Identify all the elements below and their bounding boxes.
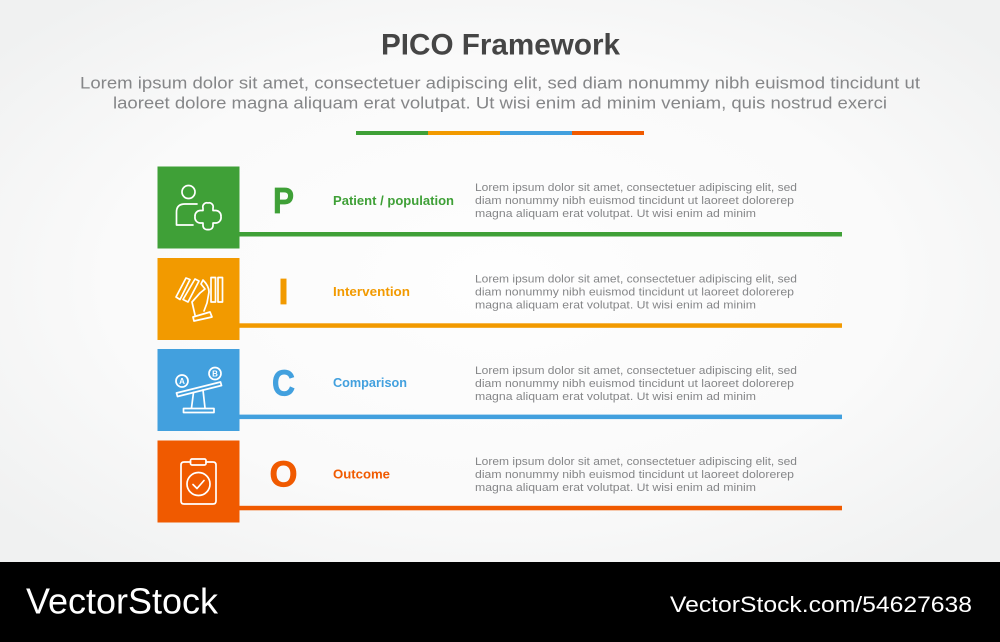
description text: Lorem ipsum dolor sit amet, consectetuer adipiscing elit, sed bbox=[475, 182, 797, 194]
icon: seesaw balance A and B bbox=[176, 368, 222, 412]
green row underline bbox=[239, 232, 842, 236]
letter P: P bbox=[273, 180, 294, 221]
subtitle text block: Lorem ipsum dolor sit amet, consectetuer adipiscing elit, sed diam nonummy nibh euismod tincidunt ut bbox=[80, 74, 920, 92]
description text bbox=[475, 274, 797, 312]
row: P patient / population bbox=[158, 166, 842, 248]
label: outcome: Outcome bbox=[333, 466, 390, 482]
subtitle text block bbox=[80, 74, 920, 112]
blue row underline bbox=[239, 415, 842, 419]
orange icon tile bbox=[158, 258, 240, 340]
row: C comparison bbox=[158, 349, 842, 431]
description text bbox=[475, 365, 797, 403]
row: C comparison: B bbox=[212, 370, 218, 378]
letter O: O bbox=[269, 454, 298, 494]
footer bar bbox=[0, 562, 1000, 642]
label: comparison: Comparison bbox=[333, 375, 407, 390]
icon: hand stopping dominoes bbox=[176, 278, 222, 321]
description text: Lorem ipsum dolor sit amet, consectetuer adipiscing elit, sed bbox=[475, 365, 797, 377]
description text: magna aliquam erat volutpat. Ut wisi enim ad minim bbox=[475, 208, 756, 220]
footer image reference: VectorStock.com/54627638 bbox=[670, 592, 972, 617]
description text: diam nonummy nibh euismod tincidunt ut laoreet dolorerep bbox=[475, 195, 794, 207]
row: I intervention bbox=[158, 258, 842, 340]
label: patient / population: Patient / population bbox=[333, 193, 454, 208]
footer logo text: VectorStock bbox=[26, 580, 219, 622]
description text: magna aliquam erat volutpat. Ut wisi enim ad minim bbox=[475, 300, 756, 312]
description text bbox=[475, 456, 797, 494]
subtitle text block: laoreet dolore magna aliquam erat volutpat. Ut wisi enim ad minim veniam, quis nostrud exerci bbox=[113, 94, 887, 112]
four-colour title divider bbox=[356, 131, 644, 135]
icon: clipboard with check mark bbox=[181, 459, 216, 504]
description text: diam nonummy nibh euismod tincidunt ut laoreet dolorerep bbox=[475, 469, 794, 481]
icon: person with medical cross bbox=[176, 186, 221, 230]
row: C comparison: A bbox=[179, 377, 185, 386]
description text bbox=[475, 182, 797, 220]
red-orange icon tile bbox=[158, 440, 240, 522]
red-orange row underline bbox=[239, 506, 842, 510]
description text: magna aliquam erat volutpat. Ut wisi enim ad minim bbox=[475, 482, 756, 494]
blue icon tile bbox=[158, 349, 240, 431]
label: intervention: Intervention bbox=[333, 284, 410, 299]
letter C: C bbox=[272, 362, 295, 404]
description text: magna aliquam erat volutpat. Ut wisi enim ad minim bbox=[475, 391, 756, 403]
title: PICO Framework bbox=[381, 28, 620, 62]
description text: diam nonummy nibh euismod tincidunt ut laoreet dolorerep bbox=[475, 286, 794, 298]
letter I: I bbox=[278, 271, 289, 312]
description text: Lorem ipsum dolor sit amet, consectetuer adipiscing elit, sed bbox=[475, 456, 797, 468]
green icon tile bbox=[158, 166, 240, 248]
orange row underline bbox=[239, 323, 842, 328]
description text: diam nonummy nibh euismod tincidunt ut laoreet dolorerep bbox=[475, 378, 794, 390]
description text: Lorem ipsum dolor sit amet, consectetuer adipiscing elit, sed bbox=[475, 274, 797, 286]
row: O outcome bbox=[158, 440, 842, 522]
